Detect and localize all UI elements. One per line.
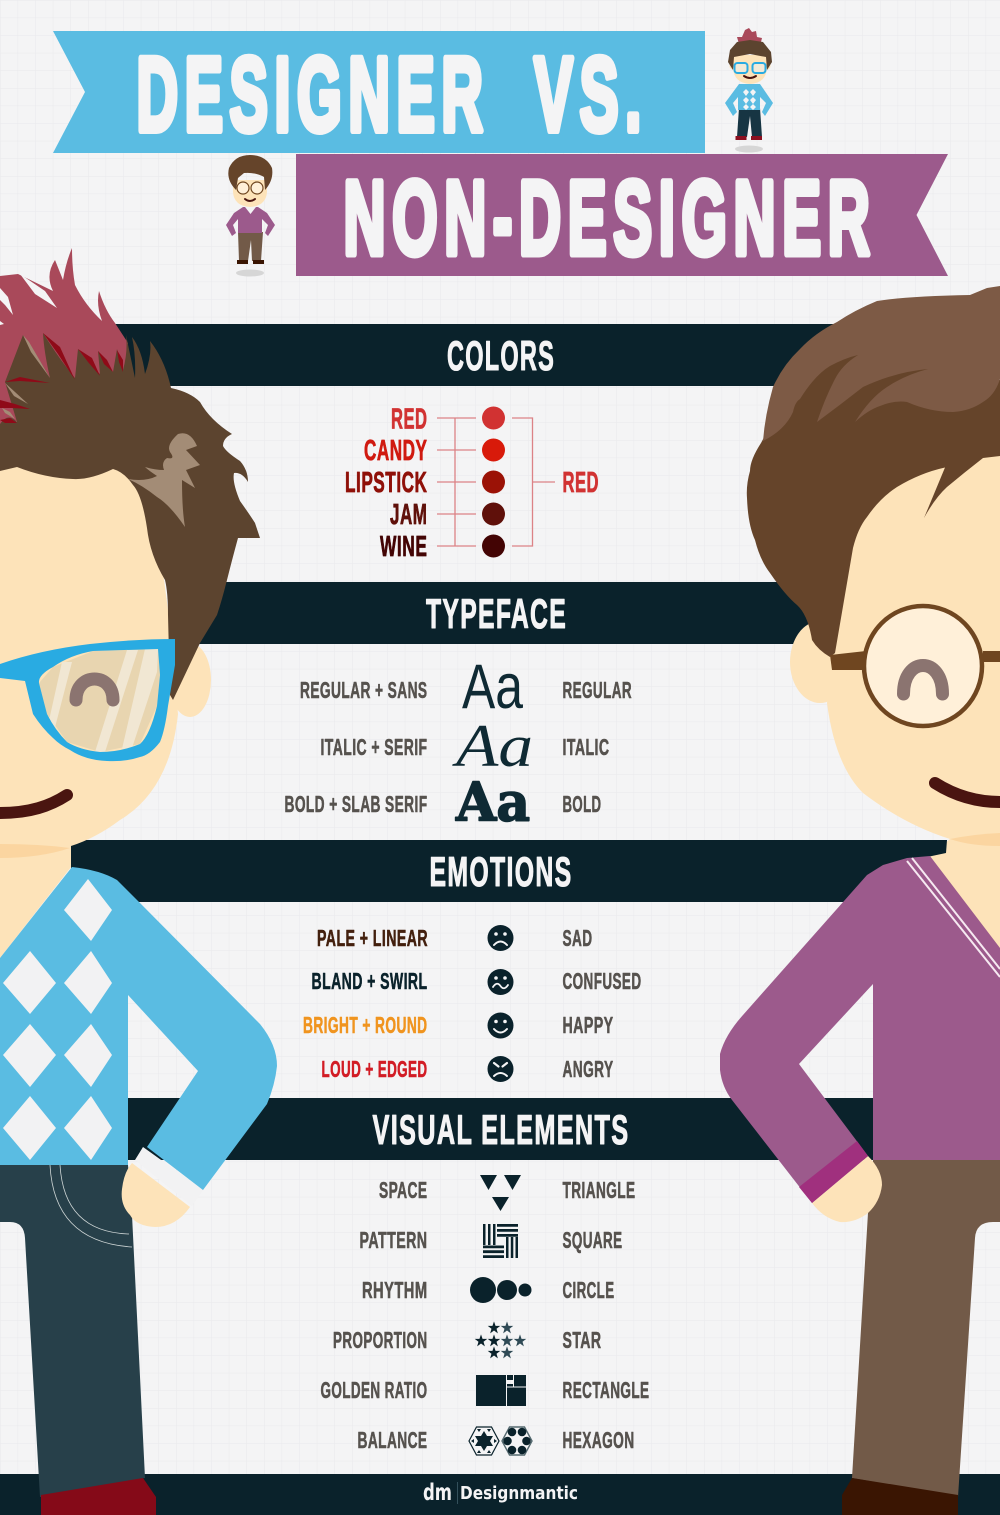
non-designer chin shadow (950, 833, 1000, 846)
visual elements rows: SQUARE (562, 1227, 622, 1253)
non-designer shoe (842, 1478, 958, 1515)
visual elements rows: RECTANGLE (562, 1377, 650, 1403)
non-designer glasses (830, 651, 866, 670)
typeface rows: Aa (455, 772, 530, 834)
typeface rows: REGULAR + SANS (300, 677, 428, 703)
typeface rows: BOLD (562, 791, 602, 817)
non-designer sweater (720, 856, 1000, 1203)
emotions rows: CONFUSED (562, 968, 642, 994)
designer sweater (0, 867, 277, 1190)
designer hair tan slivers (2, 335, 50, 419)
designer character, large (0, 248, 277, 1515)
visual elements rows: CIRCLE (562, 1277, 614, 1303)
colors chart: JAM (390, 499, 428, 531)
typeface rows (284, 652, 632, 834)
emotions rows (303, 925, 642, 1082)
section band: typeface (180, 582, 840, 644)
non-designer character, large (720, 286, 1000, 1515)
colors chart: WINE (380, 531, 428, 563)
mini non-designer character (226, 155, 275, 276)
designer pocket stitching (50, 1165, 132, 1247)
non-designer light hair (763, 286, 1000, 441)
visual elements rows: PATTERN (360, 1227, 428, 1253)
section band: emotions: EMOTIONS (430, 848, 572, 895)
non-designer collar stripes (907, 858, 1000, 977)
visual elements rows: PROPORTION (333, 1327, 428, 1353)
designer hair highlight (128, 433, 200, 527)
designer eye (76, 679, 113, 700)
non-designer mouth (935, 783, 1000, 802)
emotions rows: LOUD + EDGED (322, 1056, 428, 1082)
section band: typeface: TYPEFACE (426, 590, 567, 637)
emotions rows: BRIGHT + ROUND (303, 1012, 428, 1038)
typeface rows: REGULAR (562, 677, 632, 703)
non-designer cuff (799, 1141, 868, 1203)
band piece over neck (880, 840, 947, 866)
visual elements rows: RHYTHM (362, 1277, 428, 1303)
designer sweater diamonds (3, 879, 112, 1160)
non-designer hand (812, 1156, 882, 1222)
mini designer character (725, 28, 773, 152)
emotions rows: ANGRY (562, 1056, 614, 1082)
designer glasses frame (0, 639, 175, 761)
designer glasses lens (39, 649, 160, 752)
visual elements rows: BALANCE (358, 1427, 428, 1453)
footer band: Designmantic (460, 1483, 578, 1504)
designer mouth (0, 795, 67, 813)
non-designer neck and face (827, 440, 1000, 950)
visual elements rows: SPACE (379, 1177, 428, 1203)
section band: visual elements: VISUAL ELEMENTS (372, 1106, 630, 1153)
title banner: designer vs: VS. (534, 36, 648, 154)
section band: visual elements (125, 1098, 875, 1160)
typeface rows: ITALIC + SERIF (320, 734, 428, 760)
non-designer dark hair (747, 320, 1000, 657)
visual elements rows: STAR (562, 1327, 602, 1353)
emotions rows: SAD (562, 925, 592, 951)
designer trousers (0, 1165, 145, 1497)
designer ear (169, 643, 211, 717)
footer band: dm (423, 1480, 452, 1506)
colors chart: RED (391, 404, 428, 436)
colors chart: CANDY (364, 435, 428, 467)
colors chart: RED (562, 467, 599, 499)
non-designer ear (790, 621, 850, 703)
designer hand (122, 1163, 190, 1227)
designer neck and face (0, 400, 178, 958)
typeface rows: ITALIC (562, 734, 610, 760)
designer red hair (0, 248, 128, 430)
footer band (0, 1474, 1000, 1515)
designer hair (0, 333, 260, 700)
section band: emotions (71, 840, 900, 902)
emotions rows: HAPPY (562, 1012, 614, 1038)
section band: colors (100, 324, 880, 386)
designer shoe (41, 1478, 156, 1515)
designer lens reflections (48, 649, 158, 752)
colors chart: LIPSTICK (345, 467, 428, 499)
emotions rows: PALE + LINEAR (317, 925, 428, 951)
typeface rows: Aa (462, 652, 524, 722)
title banner: designer vs: DESIGNER (136, 36, 490, 154)
visual elements rows (320, 1175, 650, 1455)
non-designer eye (904, 666, 942, 694)
typeface rows: BOLD + SLAB SERIF (284, 791, 428, 817)
visual elements rows: TRIANGLE (562, 1177, 636, 1203)
colors chart (345, 404, 599, 563)
designer hair gaps (0, 274, 57, 325)
visual elements rows: HEXAGON (562, 1427, 634, 1453)
designer chin shadow (0, 844, 70, 858)
designer hair edge slivers (0, 333, 123, 423)
designer cuff (135, 1147, 203, 1206)
typeface rows: Aa (451, 713, 533, 779)
section band: colors: COLORS (447, 332, 555, 379)
non-designer trousers (852, 1160, 1000, 1497)
emotions rows: BLAND + SWIRL (312, 968, 428, 994)
visual elements rows: GOLDEN RATIO (320, 1377, 428, 1403)
